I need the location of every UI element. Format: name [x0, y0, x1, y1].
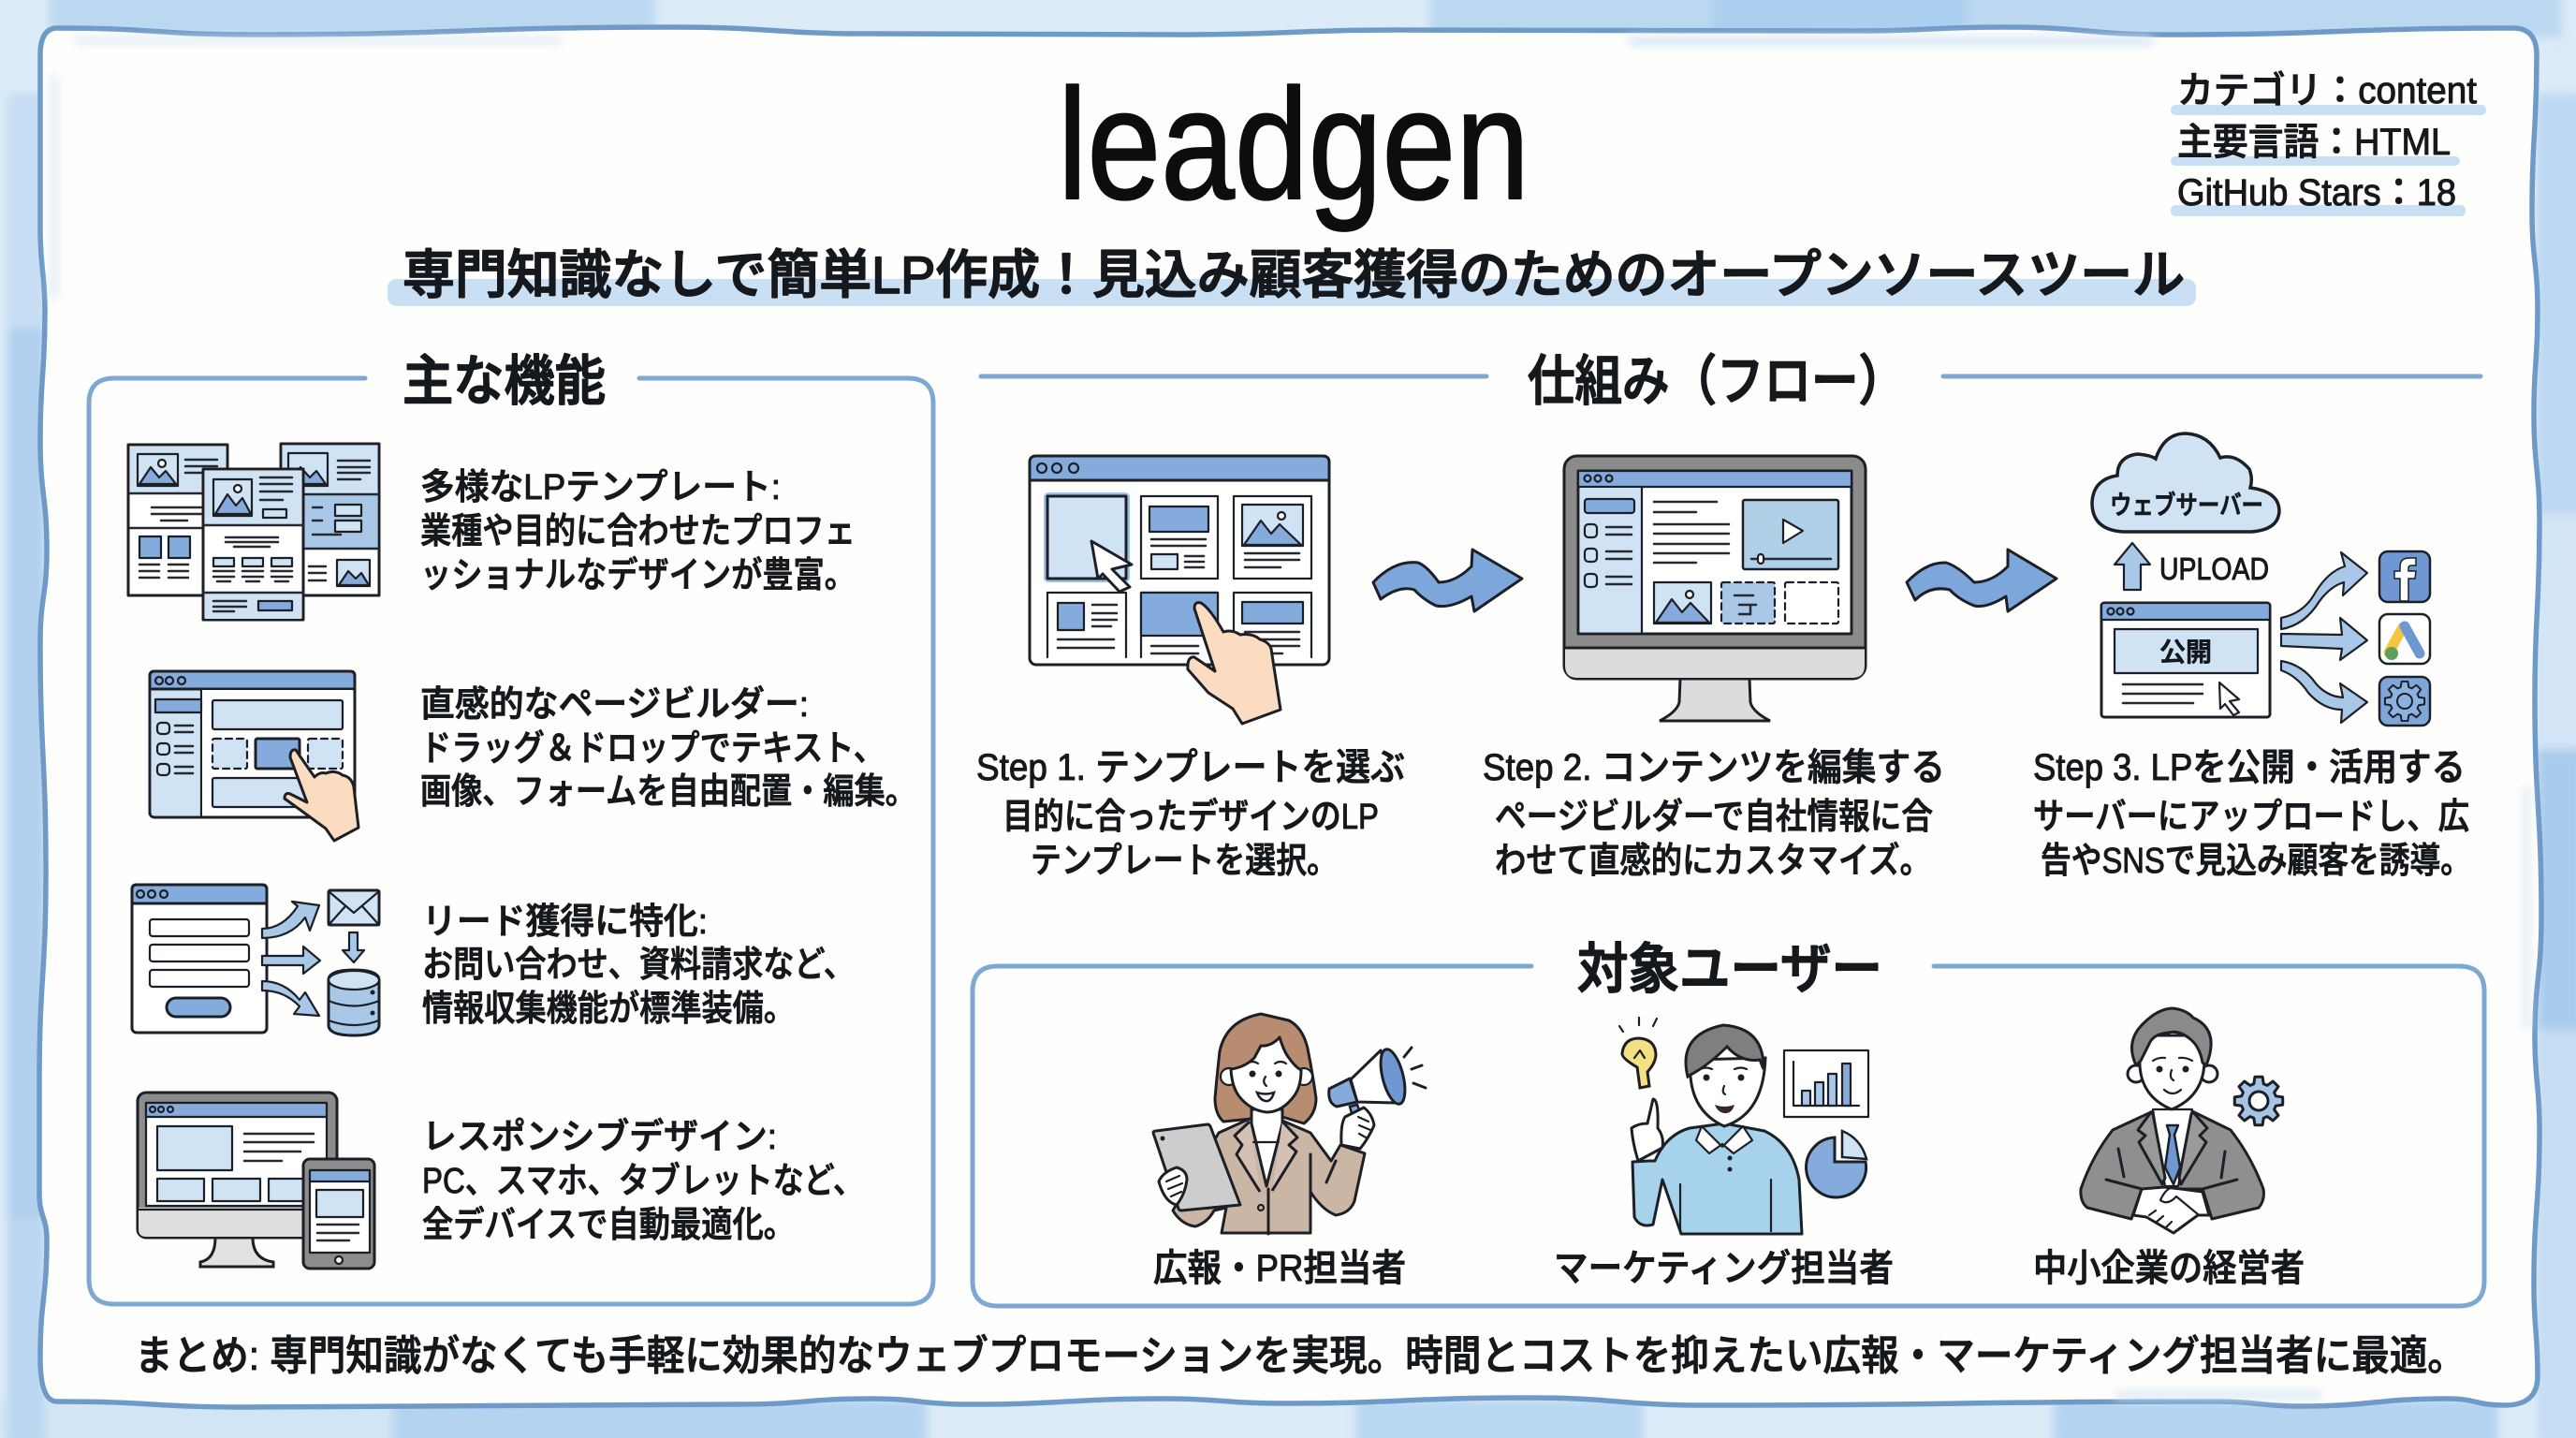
text: step 2: Step 2. コンテンツを編集する: [1483, 747, 1945, 788]
text: responsive: 全デバイスで自動最適化。: [422, 1206, 795, 1245]
text: step 1: 目的に合ったデザインのLP: [1003, 798, 1379, 837]
text: lead capture: リード獲得に特化:: [422, 902, 708, 942]
icon: settings gear: [2379, 677, 2430, 726]
metadata block: カテゴリ：content: [2177, 70, 2477, 111]
icon: lead capture form: [132, 885, 379, 1035]
text: LP templates: 業種や目的に合わせたプロフェ: [420, 512, 856, 551]
figure: marketer with idea and charts: [1619, 1018, 1868, 1234]
text: lead capture: [422, 902, 855, 1029]
metadata block: [2171, 70, 2486, 216]
arrow: step 2 to step 3: [1907, 550, 2056, 611]
text: step 3: [2033, 747, 2471, 881]
text: lead capture: 情報収集機能が標準装備。: [422, 990, 795, 1029]
label: marketer: マーケティング担当者: [1554, 1248, 1894, 1289]
label: upload: UPLOAD: [2159, 551, 2269, 586]
text: step 3: 告やSNSで見込み顧客を誘導。: [2041, 842, 2471, 881]
icon: page builder: [150, 671, 359, 841]
figure: business owner with handshake: [2081, 1008, 2283, 1233]
arrow: step 1 to step 2: [1373, 550, 1522, 611]
icon: step 2 editing monitor: [1564, 456, 1866, 721]
label: business owner: 中小企業の経営者: [2033, 1248, 2305, 1289]
metadata block: 主要言語：HTML: [2177, 122, 2451, 163]
heading: flow: 仕組み（フロー）: [1528, 351, 1906, 412]
heading: target users: 対象ユーザー: [1577, 939, 1882, 1000]
publish window: [2101, 603, 2270, 717]
text: step 3: サーバーにアップロードし、広: [2033, 798, 2469, 837]
text: LP templates: ッショナルなデザインが豊富。: [420, 556, 856, 595]
text: page builder: [420, 685, 916, 812]
text: page builder: 直感的なページビルダー:: [420, 685, 809, 725]
text: step 1: [976, 747, 1405, 881]
text: step 2: ページビルダーで自社情報に合: [1495, 798, 1933, 837]
arrow: upload: [2115, 543, 2150, 590]
text: page builder: ドラッグ＆ドロップでテキスト、: [420, 729, 885, 769]
text: responsive: [422, 1118, 864, 1245]
text: step 2: わせて直感的にカスタマイズ。: [1495, 842, 1931, 881]
cloud: web server: [2092, 433, 2279, 532]
figure: PR woman with megaphone: [1153, 1014, 1426, 1234]
text: LP templates: 多様なLPテンプレート:: [420, 468, 781, 507]
icon: ads: [2379, 614, 2430, 664]
icon: LP templates: [128, 444, 379, 620]
title: leadgen: [1058, 56, 1530, 232]
cloud: web server: ウェブサーバー: [2110, 491, 2263, 520]
text: LP templates: [420, 468, 856, 595]
icon: step 1 template selection: [1030, 456, 1329, 724]
label: PR person: 広報・PR担当者: [1153, 1248, 1406, 1289]
panel: main features: [89, 351, 933, 1304]
metadata block: GitHub Stars：18: [2177, 172, 2456, 213]
publish window: 公開: [2159, 638, 2212, 667]
text: step 1: Step 1. テンプレートを選ぶ: [976, 747, 1405, 788]
text: step 2: [1483, 747, 1945, 881]
icon: step 3 publish and distribute: [2092, 433, 2430, 726]
subtitle with highlight: 専門知識なしで簡単LP作成！見込み顧客獲得のためのオープンソースツール: [402, 245, 2185, 304]
text: responsive: レスポンシブデザイン:: [422, 1118, 777, 1157]
icon: facebook: [2379, 551, 2430, 602]
heading: main features: 主な機能: [402, 351, 606, 412]
section: how it works flow: [976, 351, 2481, 881]
panel: target users: [973, 939, 2484, 1306]
icon: responsive devices: [138, 1093, 374, 1269]
text: step 3: Step 3. LPを公開・活用する: [2033, 747, 2466, 788]
text: page builder: 画像、フォームを自由配置・編集。: [420, 772, 916, 812]
text: lead capture: お問い合わせ、資料請求など、: [422, 946, 855, 985]
distribution arrows: [2281, 552, 2367, 723]
text: responsive: PC、スマホ、タブレットなど、: [422, 1162, 864, 1201]
text: step 1: テンプレートを選択。: [1031, 842, 1338, 881]
